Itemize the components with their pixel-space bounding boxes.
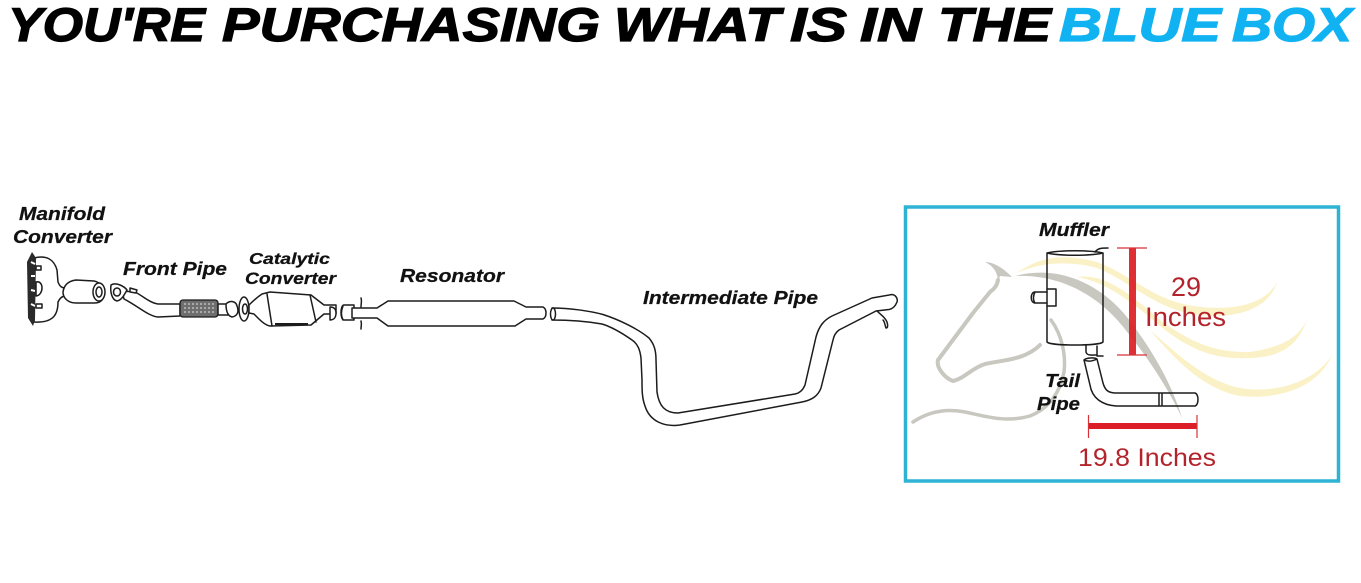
catalytic converter drawing (239, 292, 336, 326)
panel: blue box (906, 207, 1338, 481)
label: tail pipe (1037, 371, 1081, 414)
dimension line: 19.8 inches (1088, 415, 1197, 438)
label: muffler: Muffler (1039, 220, 1110, 240)
dimension text: 29 inches (1145, 272, 1226, 332)
dimension text: 29 inches: Inches (1145, 302, 1226, 332)
watermark: horse head (913, 262, 1182, 422)
label: resonator: Resonator (400, 266, 505, 286)
label: catalytic converter (245, 251, 338, 288)
resonator drawing (330, 298, 546, 329)
title (8, 0, 1355, 51)
front pipe drawing (111, 284, 238, 317)
label: manifold converter: Manifold (19, 204, 106, 224)
dimension text: 29 inches: 29 (1171, 272, 1201, 302)
label: tail pipe: Tail (1045, 371, 1081, 391)
label: catalytic converter: Converter (245, 270, 338, 288)
label: manifold converter: Converter (13, 227, 113, 247)
label: tail pipe: Pipe (1037, 394, 1080, 414)
manifold converter drawing (27, 252, 105, 326)
dimension text: 19.8 inches: 19.8 Inches (1078, 444, 1216, 472)
label: catalytic converter: Catalytic (249, 251, 330, 268)
watermark: horse mane (1017, 257, 1332, 397)
label: intermediate pipe: Intermediate Pipe (643, 288, 818, 308)
intermediate pipe drawing (550, 294, 897, 425)
label: manifold converter (13, 204, 113, 247)
muffler drawing (1031, 248, 1108, 356)
tail pipe drawing (1084, 358, 1198, 406)
dimension line: 29 inches (1117, 248, 1147, 355)
label: front pipe: Front Pipe (123, 258, 227, 279)
panel frame (906, 207, 1338, 481)
